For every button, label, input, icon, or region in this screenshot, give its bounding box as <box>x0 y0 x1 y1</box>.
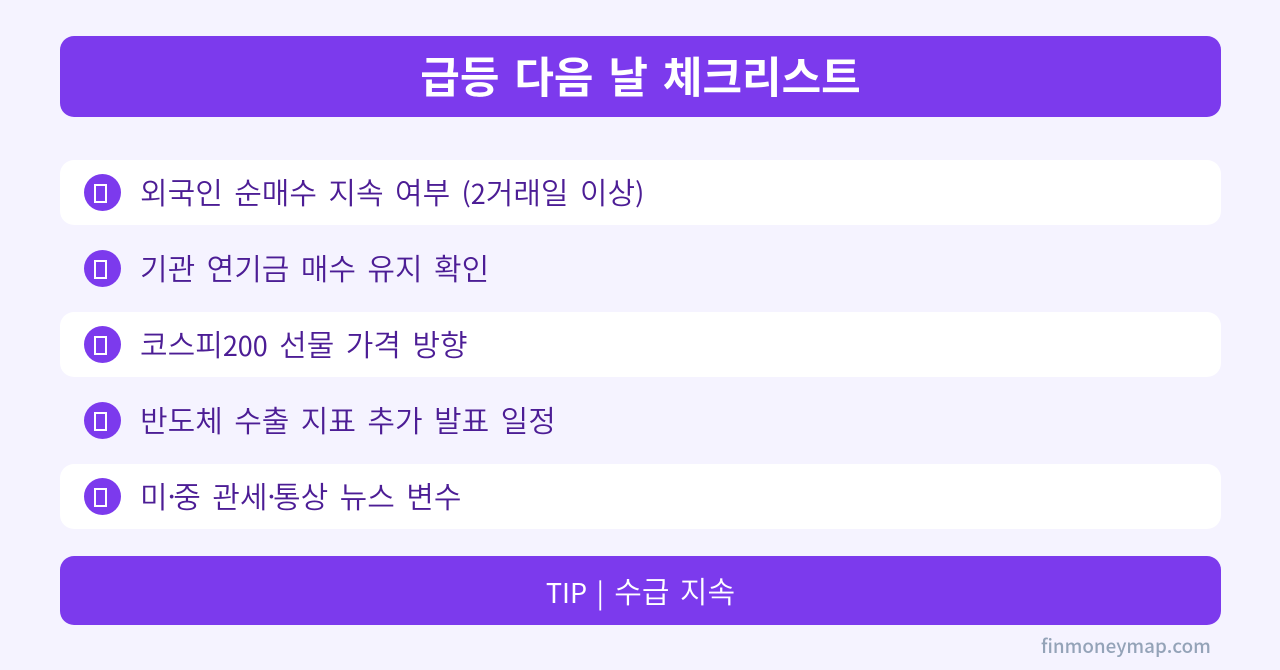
panel: checklist item 5 <box>60 464 1221 529</box>
footer: source site: finmoneymap.com <box>1041 632 1211 659</box>
panel: checklist item 2 <box>84 245 489 289</box>
icon: item 1 badge <box>84 174 121 211</box>
panel: checklist item 3 <box>60 312 1221 377</box>
panel: checklist item 4 <box>84 397 556 441</box>
text: item 1: 외국인 순매수 지속 여부 (2거래일 이상) <box>140 169 644 213</box>
text: item 5: 미·중 관세·통상 뉴스 변수 <box>140 473 461 517</box>
text: item 3: 코스피200 선물 가격 방향 <box>140 321 468 365</box>
title <box>60 36 1221 117</box>
callout: tip banner: TIP | 수급 지속 <box>546 568 735 612</box>
icon: item 3 badge <box>84 326 121 363</box>
text: item 4: 반도체 수출 지표 추가 발표 일정 <box>140 397 556 441</box>
icon: item 2 badge <box>84 250 121 287</box>
icon: item 5 badge <box>84 478 121 515</box>
title: 급등 다음 날 체크리스트 <box>420 55 861 103</box>
text: item 2: 기관 연기금 매수 유지 확인 <box>140 245 489 289</box>
panel: checklist item 1 <box>60 160 1221 225</box>
icon: item 4 badge <box>84 402 121 439</box>
callout: tip banner <box>60 556 1221 625</box>
